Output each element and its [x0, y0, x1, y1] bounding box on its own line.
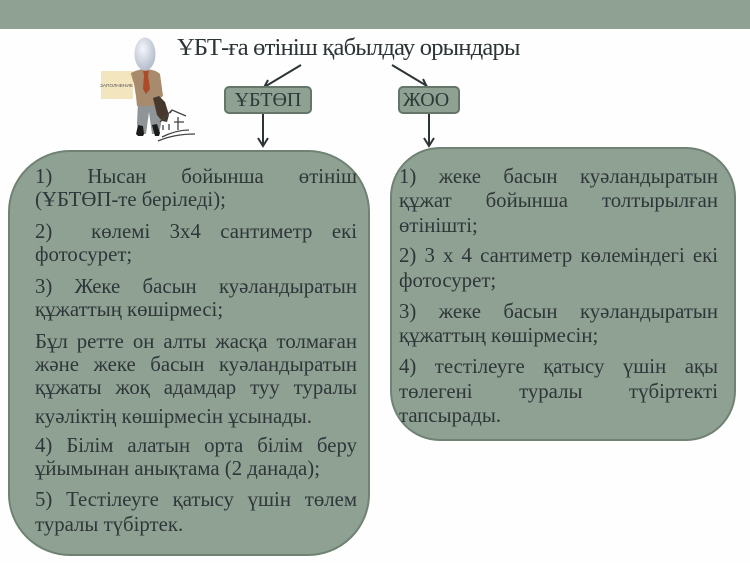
list text: ЖОО requirements: өтінішті;: [399, 214, 478, 237]
list text: ҰБТӨП requirements: туралы түбіртек.: [35, 513, 183, 536]
list text: ҰБТӨП requirements: (ҰБТӨП-те беріледі);: [35, 188, 226, 211]
house sketch: [158, 110, 195, 141]
list text: ҰБТӨП requirements: ұйымынан анықтама (2 данада);: [35, 457, 320, 480]
label box: ҰБТӨП: [224, 86, 312, 114]
top banner: [0, 0, 750, 29]
list text: ЖОО requirements: құжаттың көшірмесін;: [399, 324, 598, 347]
list text: ҰБТӨП requirements: 1) Нысан бойынша өтініш: [35, 165, 357, 188]
list text: ҰБТӨП requirements: 5) Тестілеуге қатысу үшін төлем: [35, 488, 357, 511]
panel: ЖОО documents: [390, 147, 736, 441]
label box: ҰБТӨП: ҰБТӨП: [235, 89, 301, 111]
panel: ҰБТӨП documents: [8, 150, 370, 556]
list text: ҰБТӨП requirements: құжаттың көшірмесі;: [35, 298, 223, 321]
list text: ЖОО requirements: құжат бойынша толтырылған: [399, 189, 718, 212]
figure: [131, 38, 169, 136]
list text: ЖОО requirements: фотосурет;: [399, 269, 496, 292]
form sheet: ЗАПОЛНЕНИЕ: [100, 83, 133, 89]
title: ҰБТ-ға өтініш қабылдау орындары: [177, 34, 520, 61]
list text: ЖОО requirements: [399, 165, 718, 427]
list text: ҰБТӨП requirements: [34, 165, 357, 536]
list text: ҰБТӨП requirements: және жеке басын куәландыратын: [35, 353, 357, 376]
icon: businessman holding application form: [100, 38, 195, 142]
list text: ЖОО requirements: 1) жеке басын куәландыратын: [399, 165, 718, 188]
list text: ҰБТӨП requirements: 2) көлемі 3х4 сантиметр екі: [35, 220, 357, 243]
list text: ЖОО requirements: 4) тестілеуге қатысу үшін ақы: [399, 355, 718, 378]
list text: ЖОО requirements: 3) жеке басын куәландыратын: [399, 300, 718, 323]
list text: ЖОО requirements: тапсырады.: [399, 404, 501, 427]
label box: ЖОО: ЖОО: [403, 89, 449, 111]
list text: ҰБТӨП requirements: фотосурет;: [35, 243, 132, 266]
label box: ЖОО: [398, 86, 460, 114]
list text: ЖОО requirements: төлегені туралы түбіртекті: [399, 380, 718, 403]
list text: ҰБТӨП requirements: 3) Жеке басын куәландыратын: [35, 275, 357, 298]
list text: ЖОО requirements: 2) 3 х 4 сантиметр көлеміндегі екі: [399, 244, 718, 267]
list text: ҰБТӨП requirements: куәліктің көшірмесін ұсынады.: [35, 405, 312, 428]
list text: ҰБТӨП requirements: 4) Білім алатын орта білім беру: [35, 434, 357, 457]
list text: ҰБТӨП requirements: Бұл ретте он алты жасқа толмаған: [35, 330, 357, 353]
list text: ҰБТӨП requirements: құжаты жоқ адамдар туу туралы: [35, 376, 357, 399]
